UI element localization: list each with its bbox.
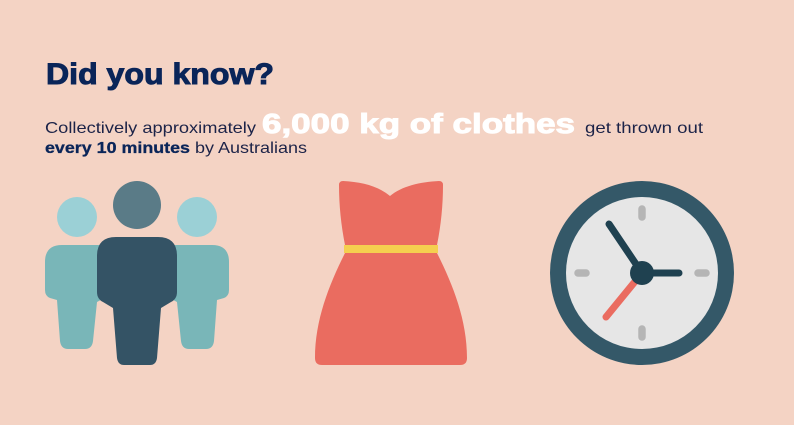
clock rim bbox=[550, 181, 734, 365]
statement text bbox=[45, 108, 704, 157]
text: lead-in: Collectively approximately bbox=[45, 120, 256, 137]
text: highlighted statistic: 6,000 kg of clothes bbox=[262, 108, 575, 139]
text: every 10 minutes: every 10 minutes bbox=[45, 140, 190, 157]
icon: dress bbox=[315, 181, 467, 365]
left person bbox=[45, 197, 110, 349]
belt bbox=[344, 245, 438, 253]
hour and minute hands bbox=[609, 224, 679, 273]
icon: clock bbox=[550, 181, 734, 365]
icon: people bbox=[45, 181, 229, 365]
hour ticks bbox=[578, 209, 706, 337]
text: thrown out: get thrown out bbox=[585, 120, 704, 137]
text: by Australians: by Australians bbox=[195, 140, 307, 157]
second hand bbox=[606, 273, 642, 317]
dress body bbox=[315, 181, 467, 365]
clock face bbox=[566, 197, 718, 349]
title: Did you know? bbox=[46, 58, 274, 91]
clock hub bbox=[630, 261, 654, 285]
centre person bbox=[97, 181, 177, 365]
right person bbox=[164, 197, 229, 349]
